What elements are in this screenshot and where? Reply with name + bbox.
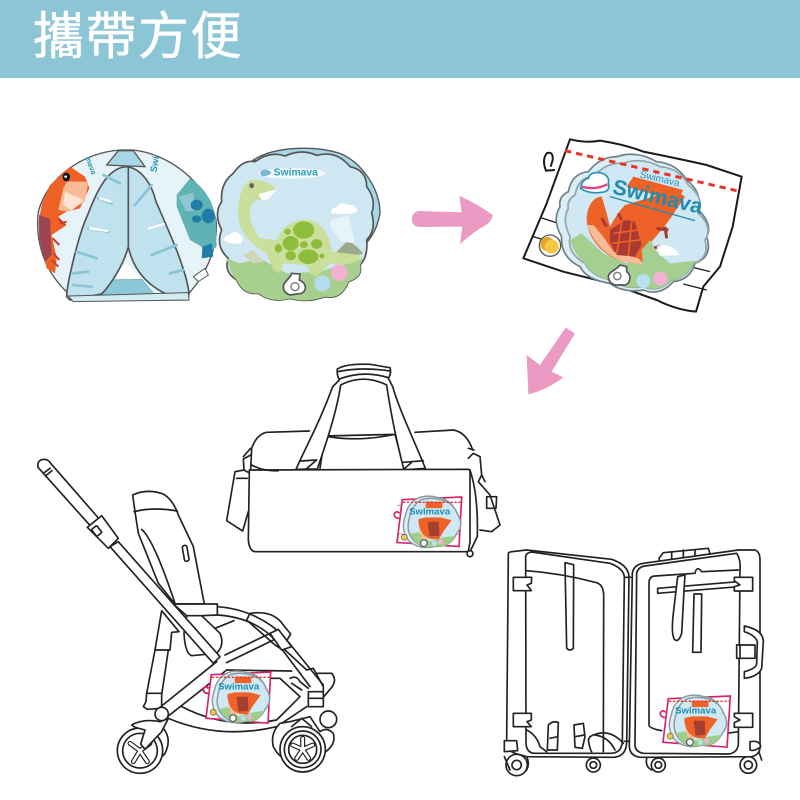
mini pouch in stroller basket: Swimava <box>218 682 260 693</box>
bag upper body <box>251 430 473 470</box>
rear block <box>308 692 323 707</box>
mini pouch on bag: Swimava <box>409 507 451 518</box>
left inner shell <box>526 552 624 753</box>
left brackets <box>513 577 532 591</box>
valve <box>608 265 630 285</box>
left lower pocket <box>527 730 623 752</box>
right straps <box>658 582 738 593</box>
right inner shell <box>635 553 740 754</box>
stroller upper <box>133 491 204 604</box>
left lobe <box>67 167 128 300</box>
logo: large brand: Swimava <box>611 175 705 219</box>
lower arms <box>157 633 273 717</box>
right foot <box>750 741 761 750</box>
stroller lower frame and wheels <box>117 604 337 773</box>
tear-open dashed line <box>565 151 737 191</box>
valve <box>283 273 305 295</box>
illustration: swim float opened, inner side: Swi <box>148 155 161 173</box>
ground <box>227 258 363 300</box>
logo <box>258 168 325 179</box>
seat block <box>173 604 217 616</box>
zip pull <box>467 551 473 557</box>
bag handles <box>296 364 425 470</box>
front fork <box>132 718 168 749</box>
illustration: duffel bag <box>227 364 500 557</box>
left strap <box>565 563 574 650</box>
tent floor <box>102 279 155 295</box>
ground <box>570 233 702 289</box>
green dinosaur <box>238 180 360 277</box>
footrest <box>247 613 291 649</box>
seat back <box>133 491 204 604</box>
header band <box>0 0 800 78</box>
front wheel <box>117 728 163 773</box>
mini pouch in stroller basket <box>203 671 271 723</box>
top lock <box>659 548 710 563</box>
illustration: folded float in pouch <box>523 139 742 312</box>
illustration: stroller <box>38 459 337 773</box>
bag main body <box>248 469 470 552</box>
basket <box>168 670 307 732</box>
rear wheel <box>280 727 325 772</box>
illustration: swim float closed, dinosaur side <box>217 148 380 300</box>
right shell <box>629 550 760 757</box>
wheels <box>504 750 762 776</box>
beads <box>331 264 348 281</box>
arrow: down-left <box>527 328 575 394</box>
rear fender <box>272 717 334 760</box>
right brackets <box>734 577 753 591</box>
handle tube <box>38 459 220 663</box>
arrow: right <box>412 196 493 244</box>
brand text: mava <box>83 155 99 176</box>
illustration: open suitcase <box>504 548 763 776</box>
right lobe <box>128 167 189 296</box>
logo: large brand <box>581 173 705 221</box>
clouds <box>331 203 357 214</box>
under-seat cushion <box>184 616 222 656</box>
left side strap <box>227 448 251 531</box>
left shell <box>507 550 629 757</box>
side handle <box>744 626 763 678</box>
orange dinosaur <box>39 167 89 273</box>
rear arc <box>217 607 323 687</box>
illustration: swim float opened, inner side <box>38 150 217 302</box>
front fender <box>153 725 168 759</box>
teal turtle dinosaur <box>177 178 217 258</box>
logo: small brand: Swimava <box>639 170 681 189</box>
front leg <box>155 611 179 650</box>
pouch outline <box>523 139 742 312</box>
mini pouch on bag <box>394 496 462 548</box>
title: 攜帶方便 <box>33 8 243 65</box>
hinge <box>624 577 632 741</box>
illustration: swim float closed, dinosaur side: Swimava <box>274 167 318 178</box>
right side strap <box>468 448 500 532</box>
mini pouch in suitcase <box>660 695 730 747</box>
float front <box>565 161 708 289</box>
rear guard <box>307 668 334 697</box>
left foot <box>504 741 518 752</box>
pouch loop <box>544 153 555 171</box>
handle grip <box>87 516 118 548</box>
float behind <box>556 154 709 292</box>
mini pouch in suitcase: Swimava <box>675 706 717 717</box>
beads <box>653 271 667 285</box>
orange dinosaur <box>587 190 685 265</box>
top fold <box>107 151 145 167</box>
gold coin clip <box>539 235 561 256</box>
